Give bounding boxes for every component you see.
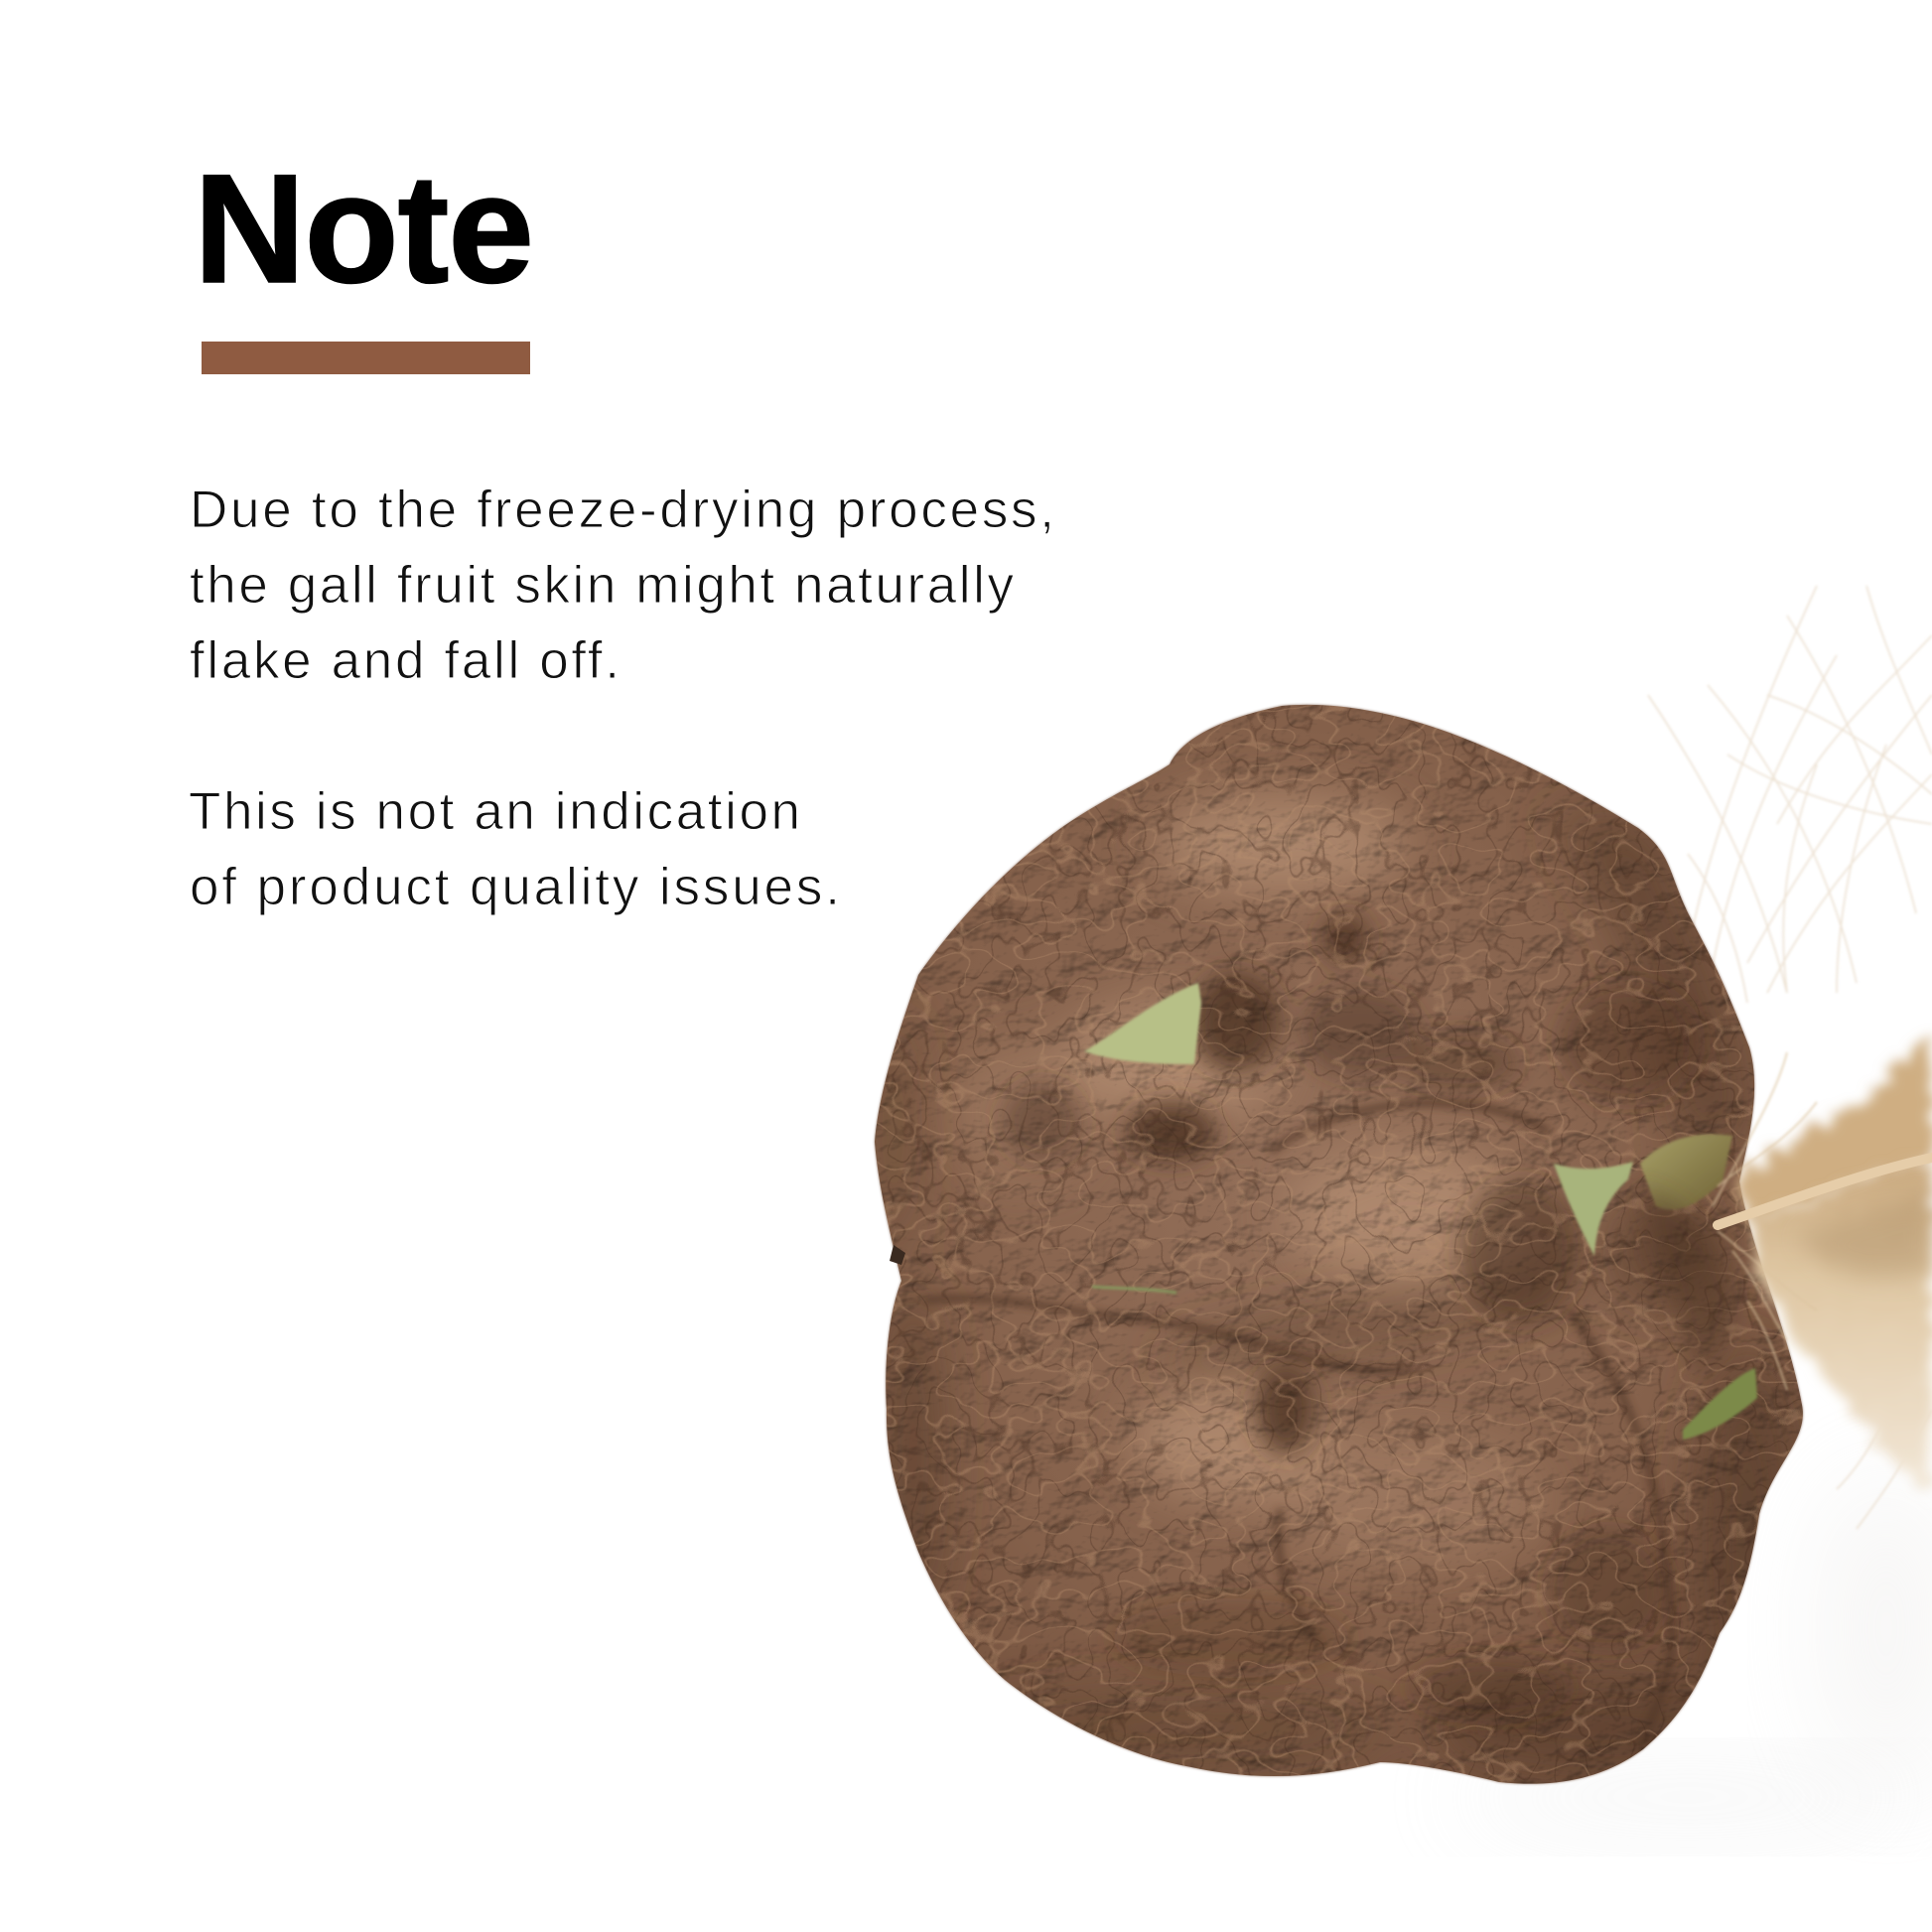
body text: Due to the freeze-drying process, xyxy=(190,481,1054,539)
body text: flake and fall off. xyxy=(190,631,620,690)
feather fibres over fruit edge xyxy=(1713,1052,1817,1390)
body text: the gall fruit skin might naturally xyxy=(190,556,1014,615)
body text xyxy=(189,481,1054,916)
feather shaft xyxy=(1718,1158,1932,1225)
feather wisps xyxy=(1648,586,1932,1529)
background shadow under fruit xyxy=(1449,1469,1932,1827)
highlights on lobes xyxy=(953,794,1549,1569)
title: Note xyxy=(194,143,534,316)
body text: of product quality issues. xyxy=(190,858,840,916)
dark rim shading xyxy=(872,814,1802,1777)
title underline bar xyxy=(202,342,530,374)
green exposed patches xyxy=(1084,983,1757,1440)
body text: This is not an indication xyxy=(189,782,800,841)
dark blotches xyxy=(1003,914,1698,1718)
lobe crease lines xyxy=(923,1103,1672,1747)
feather plume xyxy=(1737,1033,1932,1499)
gall fruit xyxy=(854,685,1827,1807)
stem stub shadow xyxy=(1638,1186,1737,1370)
dried stem nub xyxy=(890,1245,905,1265)
